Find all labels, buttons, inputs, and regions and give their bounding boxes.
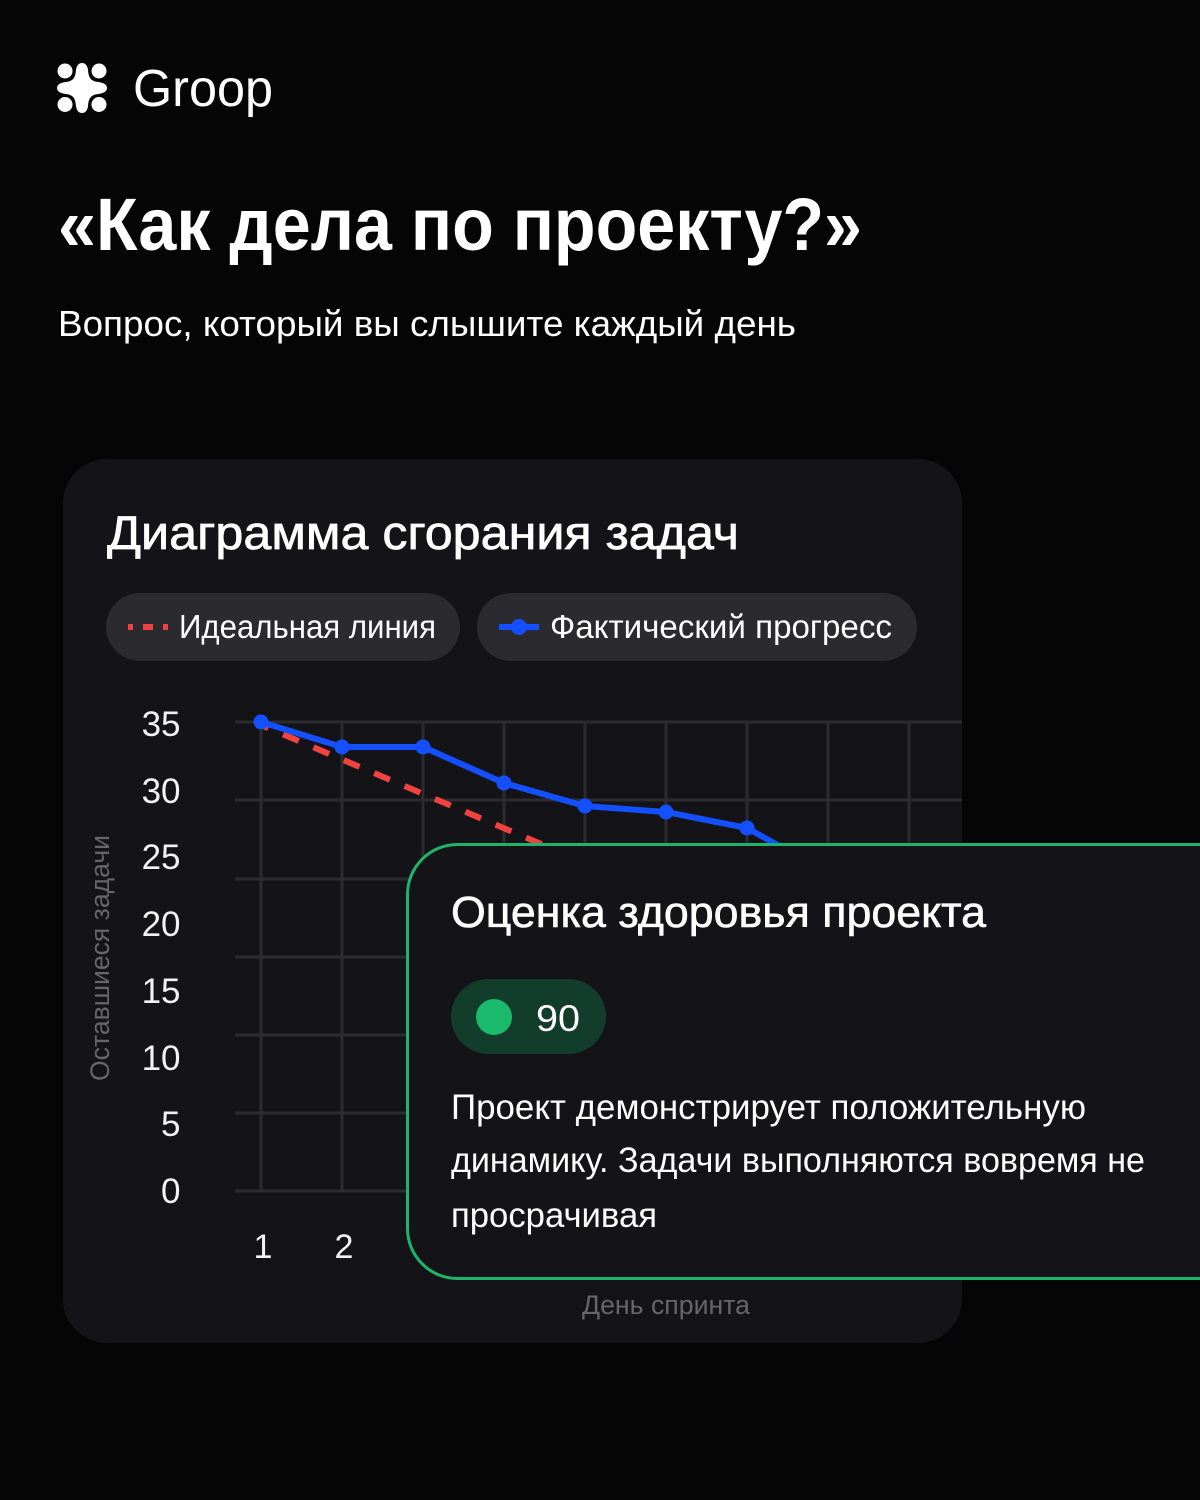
x axis labels: 1 <box>254 1228 272 1266</box>
x axis labels <box>254 1228 353 1266</box>
panel heading: Диаграмма сгорания задач <box>107 506 739 559</box>
y axis labels: 20 <box>142 905 180 944</box>
health score badge: 90 <box>536 998 580 1039</box>
legend: actual progress <box>477 593 917 661</box>
card description: просрачивая <box>451 1196 657 1235</box>
ideal line <box>261 725 560 852</box>
panel: project health card <box>408 844 1200 1278</box>
card description: динамику. Задачи выполняются вовремя не <box>451 1141 1145 1180</box>
card description: Проект демонстрирует положительную <box>451 1088 1086 1127</box>
subtitle: Вопрос, который вы слышите каждый день <box>58 303 796 344</box>
y axis labels: 25 <box>142 838 180 877</box>
x axis labels: 2 <box>335 1228 353 1266</box>
y axis labels: 5 <box>161 1105 180 1144</box>
chart grid <box>235 722 962 1191</box>
y axis labels <box>142 705 180 1211</box>
title: «Как дела по проекту?» <box>58 183 862 266</box>
y axis labels: 10 <box>142 1039 180 1078</box>
panel: burndown chart <box>63 459 962 1343</box>
logo <box>57 60 273 118</box>
card description <box>451 1088 1145 1235</box>
legend: actual progress: Фактический прогресс <box>550 608 892 645</box>
y axis labels: 15 <box>142 972 180 1011</box>
y axis title: Оставшиеся задачи <box>85 835 115 1081</box>
logo wordmark: Groop <box>133 60 273 118</box>
health score badge <box>451 979 606 1054</box>
y axis labels: 35 <box>142 705 180 744</box>
icon: logo mark <box>57 63 107 113</box>
y axis labels: 0 <box>161 1172 180 1211</box>
card heading: Оценка здоровья проекта <box>451 888 987 937</box>
legend: ideal line <box>106 593 460 661</box>
y axis labels: 30 <box>142 772 180 811</box>
x axis title: День спринта <box>582 1290 751 1320</box>
legend: ideal line: Идеальная линия <box>179 608 436 645</box>
actual progress line <box>254 714 790 852</box>
